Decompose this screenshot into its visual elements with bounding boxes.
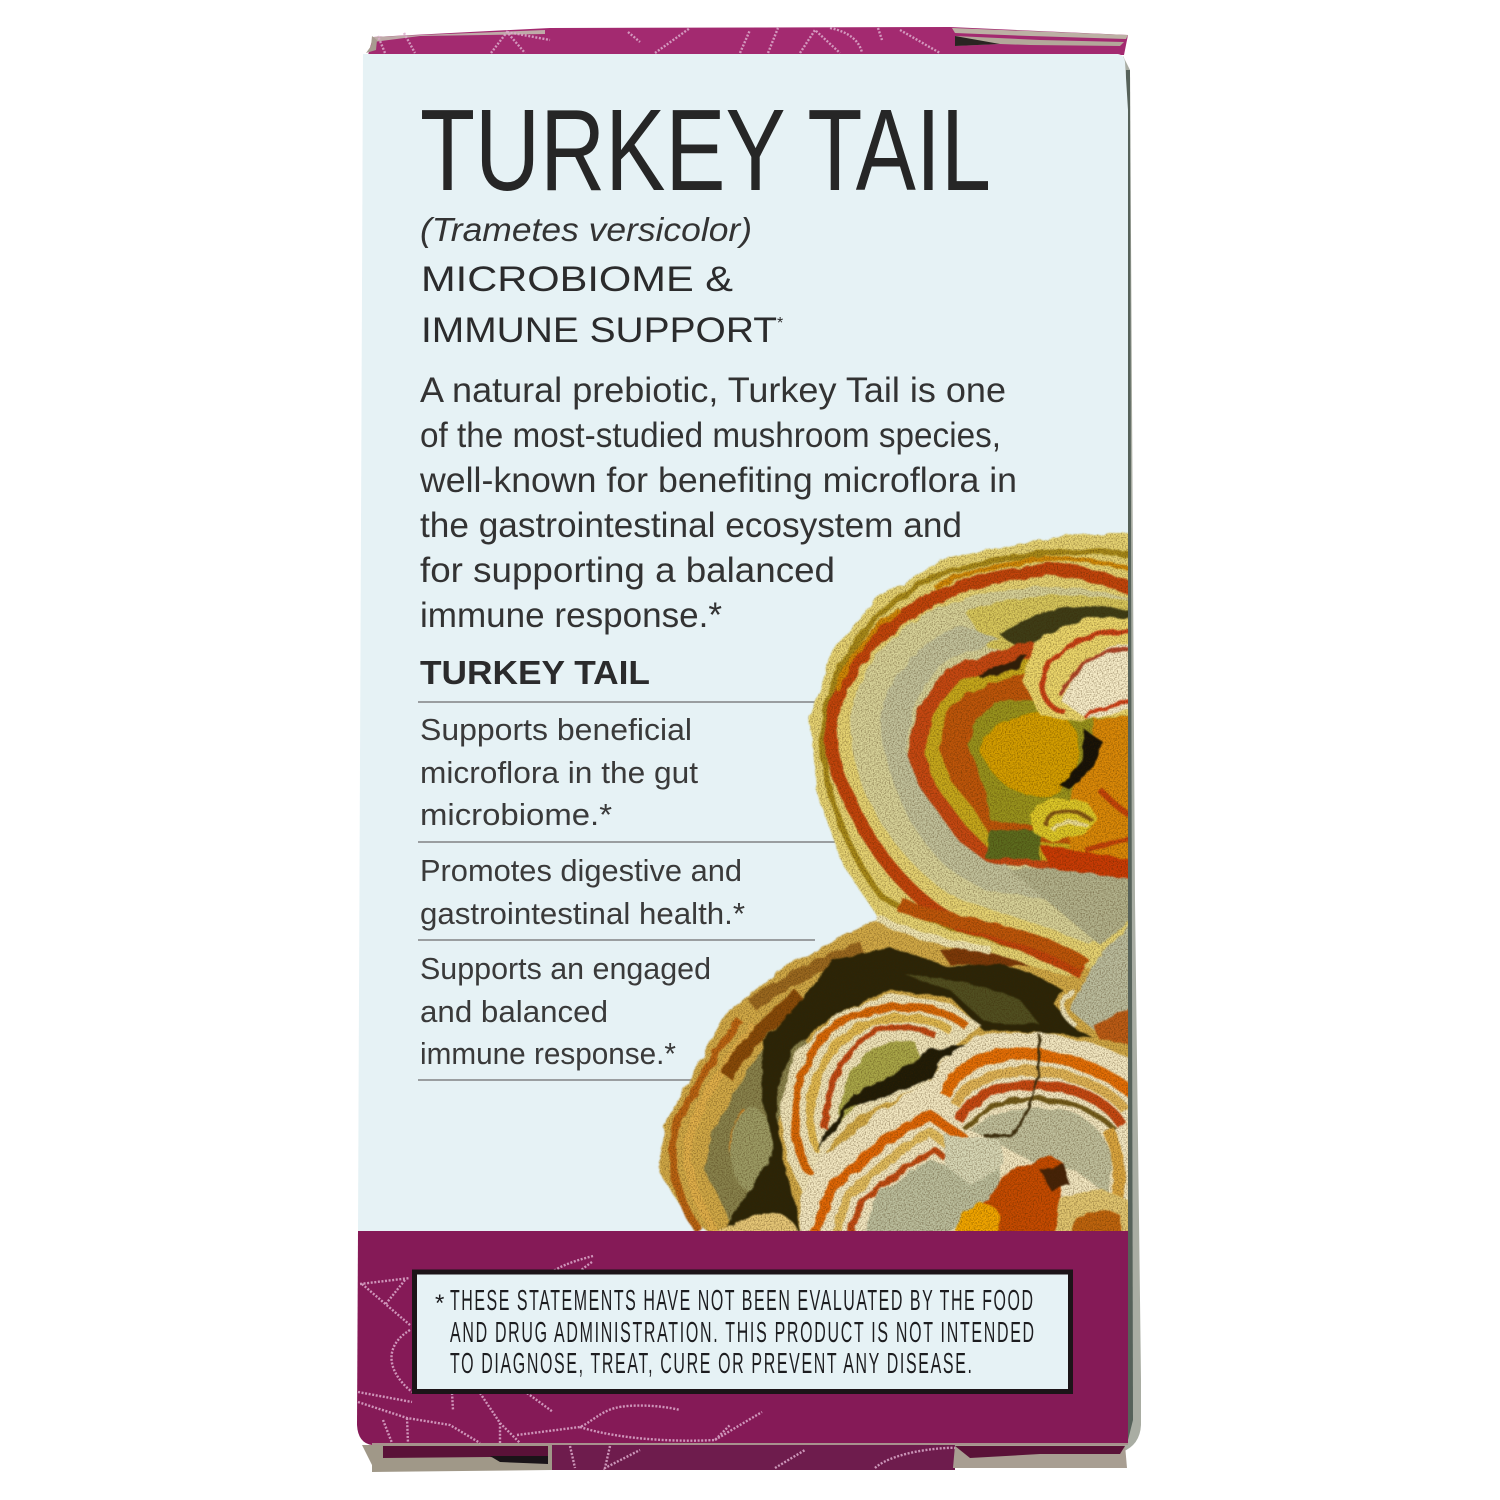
benefit: digestive health (420, 853, 745, 931)
latin name: (Trametes versicolor) (420, 211, 752, 248)
benefit: gut microflora: microbiome.* (420, 797, 612, 832)
description paragraph: A natural prebiotic, Turkey Tail is one (420, 371, 1006, 410)
purple bottom band (357, 1231, 1128, 1472)
benefit: immune response (420, 951, 711, 1071)
disclaimer box: TO DIAGNOSE, TREAT, CURE OR PREVENT ANY DISEASE. (450, 1347, 972, 1379)
description paragraph: immune response.* (420, 596, 722, 635)
benefit: digestive health: Promotes digestive and (420, 853, 742, 888)
benefit: gut microflora: microflora in the gut (420, 755, 698, 790)
benefit: gut microflora (420, 712, 698, 832)
description paragraph: well-known for benefiting microflora in (419, 461, 1017, 500)
upper mushroom cap (810, 533, 1135, 977)
disclaimer box (414, 1272, 1070, 1392)
benefits list (418, 702, 835, 1080)
disclaimer box: THESE STATEMENTS HAVE NOT BEEN EVALUATED BY THE FOOD (450, 1284, 1033, 1316)
box right side edge (1122, 56, 1141, 1452)
title: TURKEY TAIL (420, 85, 991, 215)
lower left mushroom cap (660, 900, 1135, 1235)
disclaimer box: AND DRUG ADMINISTRATION. THIS PRODUCT IS NOT INTENDED (450, 1316, 1034, 1348)
benefits heading: TURKEY TAIL (420, 654, 650, 691)
subtitle: IMMUNE SUPPORT (421, 311, 777, 350)
right grey mushroom fragment (1059, 924, 1128, 1045)
disclaimer box: * (435, 1290, 444, 1317)
subtitle: * (777, 315, 783, 332)
small upper mushroom (1023, 618, 1135, 722)
description paragraph (419, 371, 1017, 635)
benefit: immune response: and balanced (420, 994, 608, 1029)
front mushroom cap (800, 1033, 1135, 1235)
description paragraph: the gastrointestinal ecosystem and (420, 506, 962, 545)
box top flap (366, 27, 1128, 55)
subtitle (421, 260, 783, 350)
description paragraph: of the most-studied mushroom species, (420, 416, 1001, 455)
middle mushroom cap (780, 993, 983, 1193)
label panel (358, 54, 1128, 1231)
mushroom illustration (660, 533, 1135, 1235)
subtitle: MICROBIOME & (421, 260, 733, 299)
small lower mushroom (1030, 797, 1097, 842)
benefit: digestive health: gastrointestinal health.* (420, 896, 745, 931)
benefit: immune response: immune response.* (420, 1036, 676, 1071)
description paragraph: for supporting a balanced (420, 551, 835, 590)
decorative leaf lines (358, 1256, 955, 1468)
benefit: immune response: Supports an engaged (420, 951, 711, 986)
benefit: gut microflora: Supports beneficial (420, 712, 692, 747)
